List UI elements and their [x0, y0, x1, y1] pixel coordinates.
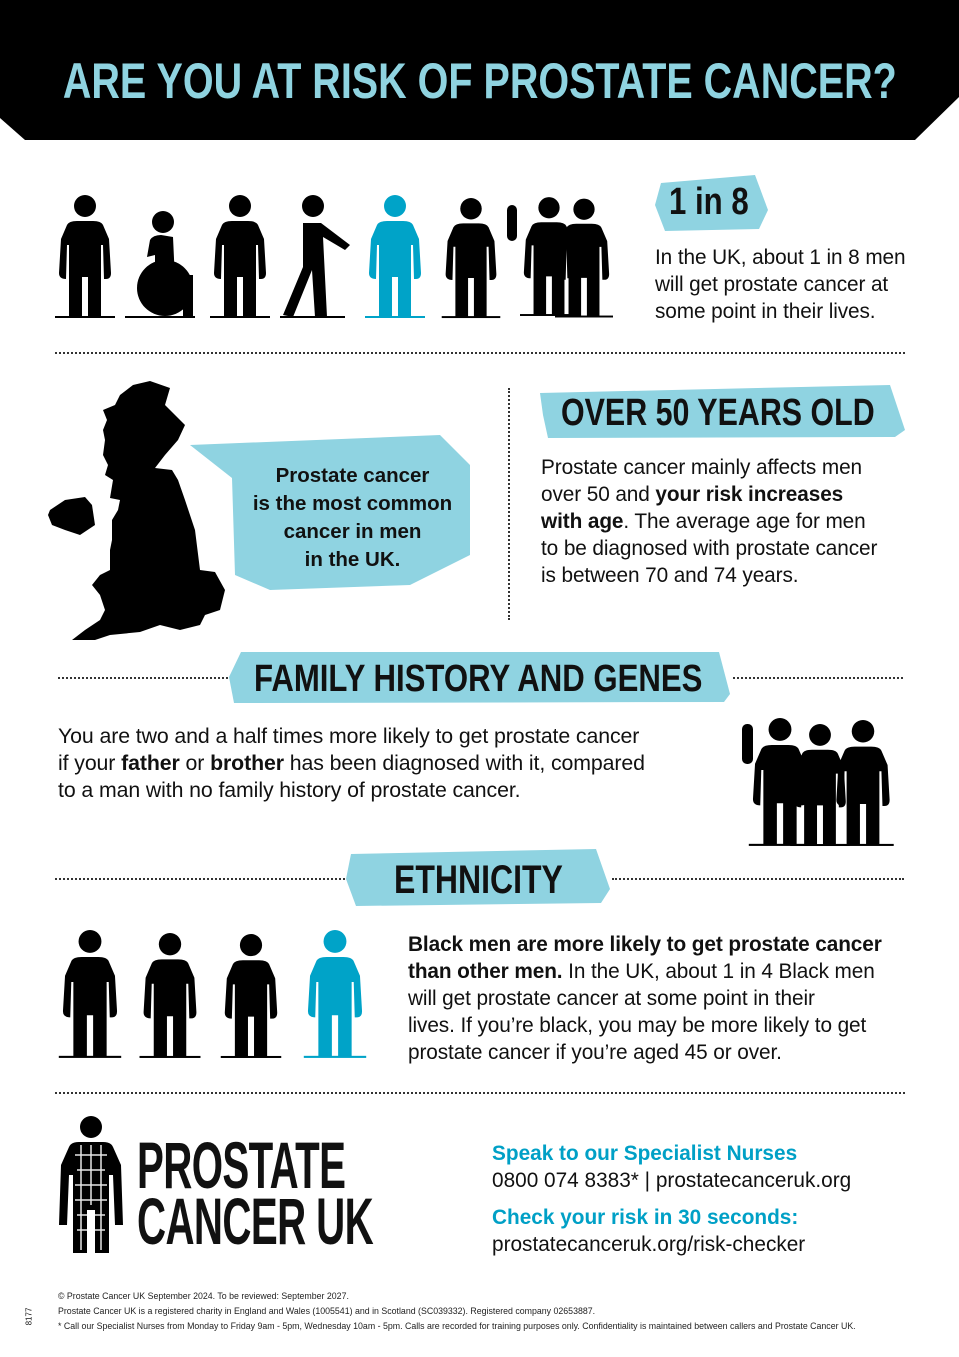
- contact info: 0800 074 8383* | prostatecanceruk.org: [492, 1169, 851, 1192]
- title: ARE YOU AT RISK OF PROSTATE CANCER?: [63, 53, 896, 109]
- contact info: Speak to our Specialist Nurses: [492, 1142, 797, 1165]
- map: UK: [48, 381, 225, 640]
- icon: group of three men: [742, 718, 894, 846]
- badge: family history: FAMILY HISTORY AND GENES: [254, 658, 702, 700]
- icon: row of seven men: [55, 195, 613, 318]
- logo: Prostate Cancer UK: [59, 1116, 374, 1258]
- callout: most common cancer: [190, 435, 470, 590]
- text: ethnicity: lives. If you’re black, you may be more likely to get: [408, 1014, 866, 1037]
- text: family history: [58, 724, 645, 802]
- text: 1 in 8: some point in their lives.: [655, 300, 876, 323]
- callout: most common cancer: Prostate cancer: [276, 464, 429, 487]
- text: ethnicity: Black men are more likely to get prostate cancer: [408, 933, 882, 956]
- text: age: is between 70 and 74 years.: [541, 564, 798, 587]
- text: 1 in 8: will get prostate cancer at: [655, 273, 888, 296]
- text: age: to be diagnosed with prostate cancer: [541, 537, 877, 560]
- text: age: over 50 and your risk increases: [541, 483, 843, 506]
- callout: most common cancer: in the UK.: [305, 548, 400, 571]
- contact info: prostatecanceruk.org/risk-checker: [492, 1233, 805, 1256]
- callout: most common cancer: is the most common: [253, 492, 452, 515]
- text: ethnicity: than other men. In the UK, about 1 in 4 Black men: [408, 960, 875, 983]
- badge: 1 in 8: [655, 175, 768, 231]
- footer small print: * Call our Specialist Nurses from Monday to Friday 9am - 5pm, Wednesday 10am - 5pm. Calls are recorded for training purposes only. Confidentiality is maintained between callers and Prostate Cancer UK.: [58, 1321, 856, 1331]
- text: ethnicity: will get prostate cancer at some point in their: [408, 987, 815, 1010]
- text: family history: You are two and a half times more likely to get prostate cancer: [58, 724, 639, 748]
- text: family history: to a man with no family history of prostate cancer.: [58, 778, 520, 802]
- footer small print: Prostate Cancer UK is a registered charity in England and Wales (1005541) and in Scotland (SC039332). Registered company 02653887.: [58, 1306, 595, 1316]
- badge: ethnicity: [346, 849, 610, 906]
- footer small print: © Prostate Cancer UK September 2024. To be reviewed: September 2027.: [58, 1291, 349, 1301]
- code 8177: 8177: [24, 1308, 33, 1325]
- badge: over 50 years old: [540, 385, 905, 438]
- text: 1 in 8: [655, 246, 906, 323]
- text: family history: if your father or brother has been diagnosed with it, compared: [58, 751, 645, 775]
- badge: over 50 years old: OVER 50 YEARS OLD: [561, 392, 875, 434]
- badge: 1 in 8: 1 in 8: [669, 181, 749, 223]
- text: 1 in 8: In the UK, about 1 in 8 men: [655, 246, 906, 269]
- header banner: [0, 0, 959, 140]
- text: age: Prostate cancer mainly affects men: [541, 456, 862, 479]
- callout: most common cancer: cancer in men: [284, 520, 421, 543]
- logo: Prostate Cancer UK: PROSTATE: [137, 1128, 345, 1202]
- text: ethnicity: [408, 933, 882, 1064]
- text: ethnicity: prostate cancer if you’re aged 45 or over.: [408, 1041, 782, 1064]
- badge: ethnicity: ETHNICITY: [394, 858, 563, 902]
- contact info: [492, 1142, 851, 1256]
- text: age: [541, 456, 878, 587]
- footer small print: [58, 1291, 856, 1331]
- contact info: Check your risk in 30 seconds:: [492, 1206, 798, 1229]
- logo: Prostate Cancer UK: CANCER UK: [137, 1184, 373, 1258]
- icon: four men: [58, 930, 366, 1058]
- text: age: with age. The average age for men: [541, 510, 866, 533]
